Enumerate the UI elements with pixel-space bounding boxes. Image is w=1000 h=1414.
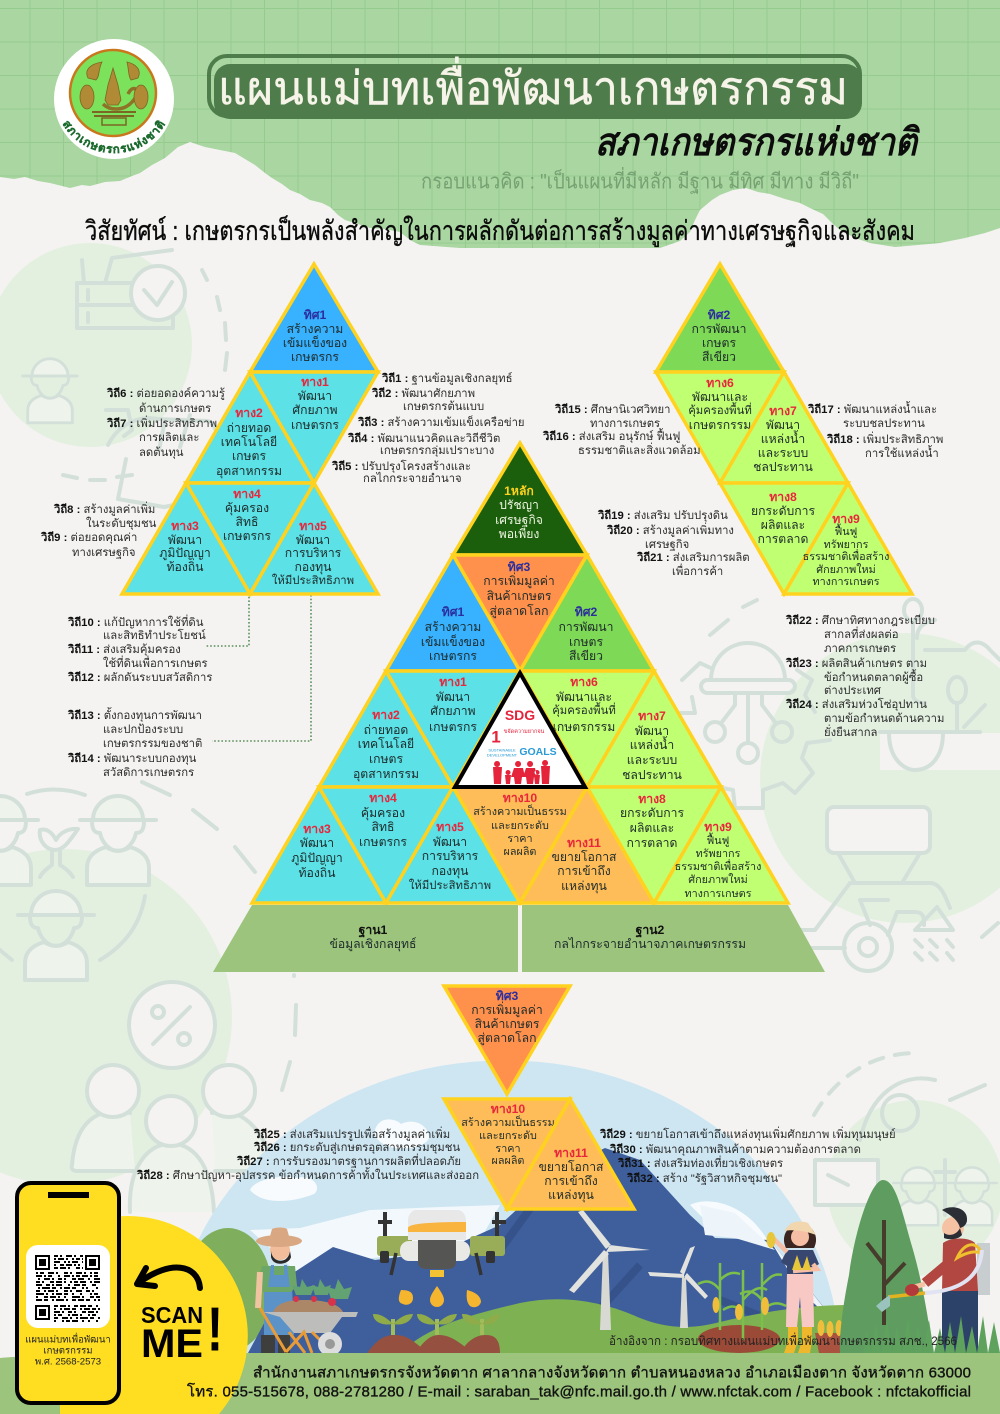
triangle: ทาง7: และระบบ xyxy=(627,753,677,767)
methods 15-18: ธรรมชาติและสิ่งแวดล้อม xyxy=(578,442,701,457)
methods 19-21: วิถี21 : ส่งเสริมการผลิต xyxy=(636,551,750,564)
triangle: ทาง5: การบริหาร xyxy=(422,849,479,863)
methods 10-14: วิถี11 : ส่งเสริมคุ้มครอง xyxy=(67,643,181,656)
icon: farmer top left xyxy=(23,359,77,423)
triangle: ทิศ1: เกษตรกร xyxy=(429,649,477,663)
base 2: กลไกกระจายอำนาจภาคเกษตรกรรม xyxy=(554,937,746,951)
triangle: ทาง9: ทางการเกษตร xyxy=(812,576,880,588)
triangle: ทิศ2: การพัฒนา xyxy=(692,322,746,336)
methods 10-14: วิถี10 : แก้ปัญหาการใช้ที่ดิน xyxy=(67,614,204,629)
triangle: ทิศ1: สร้างความ xyxy=(425,620,481,634)
footer contacts: โทร. 055-515678, 088-2781280 / E-mail : saraban_tak@nfc.mail.go.th / www.nfctak.com / Facebook : nfctakofficial xyxy=(187,1382,971,1400)
triangle: ทาง7 xyxy=(720,372,848,483)
triangle: ทาง4: คุ้มครอง xyxy=(225,501,269,516)
methods 25-28: วิถี26 : ยกระดับสู่เกษตรอุตสาหกรรมชุมชน xyxy=(253,1141,460,1154)
SDG centre triangle: DEVELOPMENT xyxy=(487,752,518,758)
triangle: ทาง9: ฟื้นฟู xyxy=(707,832,729,847)
triangle: ทาง10 xyxy=(444,1099,570,1209)
triangle: ทาง9: ฟื้นฟู xyxy=(835,523,857,538)
triangle: ทาง1 xyxy=(386,671,520,787)
triangle: ทาง2 xyxy=(319,671,453,787)
triangle: ทาง1: ศักยภาพ xyxy=(430,704,476,718)
triangle: ทาง9: ทางการเกษตร xyxy=(684,888,752,900)
triangle: ทาง10: สร้างความเป็นธรรม xyxy=(461,1115,555,1129)
triangle: ทาง3 xyxy=(252,787,386,903)
base 1: ข้อมูลเชิงกลยุทธ์ xyxy=(329,937,417,952)
triangle: ทิศ3: สินค้าเกษตร xyxy=(487,589,552,603)
methods 29-32: วิถี29 : ขยายโอกาสเข้าถึงแหล่งทุนเพิ่มศักยภาพ เพิ่มทุนมนุษย์ xyxy=(599,1126,896,1141)
methods 19-21: เพื่อการค้า xyxy=(672,563,723,578)
triangle: ทาง2: อุตสาหกรรม xyxy=(216,464,282,479)
triangle: ทาง8 xyxy=(587,787,721,903)
triangle: ทาง10: ราคา xyxy=(507,833,533,845)
triangle: ทาง8: ทาง8 xyxy=(769,490,797,504)
triangle: ทาง9: ศักยภาพใหม่ xyxy=(816,563,876,576)
triangle: ทาง2 xyxy=(186,372,314,483)
triangle: ทิศ3: การเพิ่มมูลค่า xyxy=(483,572,555,589)
triangle: ทาง9: ทาง9 xyxy=(704,820,732,834)
triangle: ทิศ2 xyxy=(520,555,654,671)
methods 22-24 xyxy=(785,614,944,739)
QR caption: พ.ศ. 2568-2573 xyxy=(35,1356,101,1368)
methods 15-18: วิถี17 : พัฒนาแหล่งน้ำและ xyxy=(807,401,937,416)
methods 10-14: วิถี12 : ผลักดันระบบสวัสดิการ xyxy=(67,671,212,684)
triangle: ทาง3: ภูมิปัญญา xyxy=(291,851,343,866)
bottom flipped pyramid xyxy=(444,986,634,1209)
methods 19-21 xyxy=(597,509,750,578)
bottom landscape scene xyxy=(170,1060,1000,1356)
triangle: ทาง6: ทาง6 xyxy=(570,675,598,689)
triangle: ทาง1: พัฒนา xyxy=(436,690,470,704)
triangle: ทาง2: เกษตร xyxy=(369,752,403,766)
methods 10-14: และสิทธิทำประโยชน์ xyxy=(103,628,206,642)
triangle: ทาง2: ทาง2 xyxy=(235,406,263,420)
SDG centre triangle xyxy=(455,673,585,787)
triangle: ทาง11: แหล่งทุน xyxy=(561,879,607,894)
triangle: ทิศ1: เข้มแข็งของ xyxy=(283,335,347,350)
triangle: ทาง8: การตลาด xyxy=(758,532,808,546)
icon: hand and plant xyxy=(106,410,218,507)
triangle: ทาง6 xyxy=(656,372,784,483)
methods 10-14: วิถี14 : พัฒนาระบบกองทุน xyxy=(67,752,197,765)
triangle: ทาง4: คุ้มครอง xyxy=(361,806,405,821)
methods 22-24: วิถี22 : ศึกษาทิศทางกฎระเบียบ xyxy=(785,614,935,627)
icon: gear with helmet xyxy=(677,600,830,808)
methods 15-18: วิถี16 : ส่งเสริม อนุรักษ์ ฟื้นฟู xyxy=(542,428,680,443)
reference note: อ้างอิงจาก : กรอบทิศทางแผนแม่บทเพื่อพัฒนาเกษตรกรรม สภช., 2566 xyxy=(609,1332,957,1348)
icon: plants and pot xyxy=(880,599,1000,770)
triangle: ทาง7 xyxy=(587,671,721,787)
triangle: ทิศ3: สู่ตลาดโลก xyxy=(490,604,548,619)
triangle: 1 หลัก: พอเพียง xyxy=(499,527,539,541)
triangle: ทาง1: ทาง1 xyxy=(301,375,329,389)
triangle: ทาง1: เกษตรกร xyxy=(429,720,477,734)
triangle: ทาง10: และยกระดับ xyxy=(491,820,549,832)
triangle: ทาง9: ทรัพยากร xyxy=(696,848,741,860)
triangle: ทาง1: ทาง1 xyxy=(439,675,467,689)
triangle: ทิศ1 xyxy=(250,264,378,372)
triangle: ทาง5: พัฒนา xyxy=(296,533,330,547)
methods 1-5: วิถี1 : ฐานข้อมูลเชิงกลยุทธ์ xyxy=(381,371,512,385)
triangle: ทาง5: ให้มีประสิทธิภาพ xyxy=(272,574,354,587)
triangle: ทาง5: กองทุน xyxy=(431,864,469,879)
methods 6-9: วิถี6 : ต่อยอดองค์ความรู้ xyxy=(106,386,225,400)
triangle: ทาง9: ทาง9 xyxy=(832,512,860,526)
green ground xyxy=(400,1299,850,1353)
triangle: ทิศ1 xyxy=(386,555,520,671)
triangle: ทาง6: เกษตรกรรม xyxy=(553,720,615,734)
methods 10-14: สวัสดิการเกษตรกร xyxy=(103,767,194,779)
triangle: ทิศ1: ทิศ1 xyxy=(442,605,464,619)
methods 19-21: วิถี20 : สร้างมูลค่าเพิ่มทาง xyxy=(606,522,734,537)
triangle: ทาง5: ทาง5 xyxy=(299,519,327,533)
methods 10-14: ใช้ที่ดินเพื่อการเกษตร xyxy=(103,655,208,670)
yellow scan circle xyxy=(60,1216,248,1414)
triangle: ทาง4 xyxy=(319,787,453,903)
methods 22-24: สากลที่ส่งผลต่อ xyxy=(824,626,899,641)
sprouts on soil xyxy=(367,1314,500,1353)
icon: crate with check xyxy=(63,250,227,480)
triangle: ทาง8: การตลาด xyxy=(627,836,677,850)
triangle: ทาง8 xyxy=(720,483,848,594)
methods 1-5: เกษตรกรต้นแบบ xyxy=(403,400,484,413)
SDG centre triangle: GOALS xyxy=(519,746,557,758)
triangle: ทาง2: เทคโนโลยี xyxy=(221,435,277,449)
methods 1-5: วิถี2 : พัฒนาศักยภาพ xyxy=(371,387,475,400)
methods 29-32: วิถี32 : สร้าง "รัฐวิสาหกิจชุมชน" xyxy=(626,1172,782,1185)
title banner: แผนแม่บทเพื่อพัฒนาเกษตรกรรม xyxy=(218,56,848,114)
arrow pointing to QR xyxy=(137,1268,200,1288)
icon: farmers and sprout xyxy=(0,782,296,1090)
methods 15-18 xyxy=(542,401,943,460)
triangle: ทาง6: พัฒนาและ xyxy=(556,690,612,704)
triangle: ทาง10: ผลผลิต xyxy=(504,846,536,858)
methods 22-24: ข้อกำหนดตลาดผู้ซื้อ xyxy=(824,669,923,684)
scan me text: ! xyxy=(207,1296,223,1364)
triangle: ทาง4: เกษตรกร xyxy=(359,835,407,849)
triangle: ทาง4: สิทธิ xyxy=(372,820,394,834)
triangle: ทาง6 xyxy=(520,671,654,787)
triangle: ทาง3: ภูมิปัญญา xyxy=(159,546,211,561)
left green hill xyxy=(184,1228,272,1352)
methods 6-9: วิถี8 : สร้างมูลค่าเพิ่ม xyxy=(53,501,155,516)
triangle: ทิศ2: ทิศ2 xyxy=(575,605,597,619)
methods 22-24: ภาคการเกษตร xyxy=(824,643,896,655)
triangle: ทิศ1: ทิศ1 xyxy=(304,308,326,322)
triangle: ทาง1 xyxy=(250,372,378,483)
header green grid paper xyxy=(0,0,1000,256)
triangle: ทาง10 xyxy=(453,787,587,903)
triangle: ทาง7: พัฒนา xyxy=(766,418,800,432)
QR caption: แผนแม่บทเพื่อพัฒนา xyxy=(25,1332,111,1346)
triangle: ทาง2: ถ่ายทอด xyxy=(364,723,408,737)
methods 25-28: วิถี25 : ส่งเสริมแปรรูปเพื่อสร้างมูลค่าเพิ่ม xyxy=(253,1126,450,1141)
methods 1-5: เกษตรกรกลุ่มเปราะบาง xyxy=(380,445,494,457)
methods 15-18: ทางการเกษตร xyxy=(590,418,660,430)
methods 22-24: วิถี23 : ผลิตสินค้าเกษตร ตาม xyxy=(785,657,927,670)
sky dome xyxy=(170,1060,840,1353)
triangle: ทาง11: ทาง11 xyxy=(554,1146,588,1160)
triangle: ทิศ3: การเพิ่มมูลค่า xyxy=(471,1001,543,1018)
phone with QR code xyxy=(17,1183,119,1403)
triangle: ทิศ3: ทิศ3 xyxy=(496,989,518,1003)
triangle: ทาง10: ทาง10 xyxy=(503,791,537,805)
triangle: ทาง4: ทาง4 xyxy=(233,487,261,501)
triangle: ทาง4 xyxy=(186,483,314,594)
QR caption: เกษตรกรรม xyxy=(43,1346,93,1356)
triangle: ทาง2: อุตสาหกรรม xyxy=(353,767,419,782)
methods 25-28: วิถี27 : การรับรองมาตรฐานการผลิตที่ปลอดภัย xyxy=(236,1153,461,1168)
triangle: ทิศ3: ทิศ3 xyxy=(508,560,530,574)
farmer with wheelbarrow xyxy=(256,1228,358,1356)
methods 1-5: วิถี4 : พัฒนาแนวคิดและวิถีชีวิต xyxy=(347,432,500,445)
methods 6-9: ในระดับชุมชน xyxy=(86,517,157,530)
triangle: ทาง4: สิทธิ xyxy=(236,515,258,529)
triangle: ทาง7: แหล่งน้ำ xyxy=(630,736,674,752)
triangle: ทาง9 xyxy=(784,483,912,594)
triangle: ทาง11 xyxy=(520,787,654,903)
blue mountains xyxy=(248,1148,842,1353)
methods 15-18: ระบบชลประทาน xyxy=(843,418,925,430)
triangle: ทาง9: ธรรมชาติเพื่อสร้าง xyxy=(803,549,889,563)
methods 10-14: และปกป้องระบบ xyxy=(103,723,183,736)
triangle: ทาง8: ผลิตและ xyxy=(630,821,674,835)
icon: group of people xyxy=(72,1065,272,1212)
triangle: ทาง2: ถ่ายทอด xyxy=(227,421,271,435)
triangle: ทาง3 xyxy=(122,483,250,594)
scan me text: ME xyxy=(141,1322,203,1366)
triangle: ทาง10: ทาง10 xyxy=(491,1102,525,1116)
methods 1-5: กลไกกระจายอำนาจ xyxy=(363,472,462,485)
base 1 xyxy=(213,905,518,972)
methods 22-24: ตามข้อกำหนดด้านความ xyxy=(824,712,944,725)
fertilizer drops xyxy=(399,1286,481,1307)
triangle: ทาง10: สร้างความเป็นธรรม xyxy=(473,804,567,818)
triangle: ทิศ2: เกษตร xyxy=(569,635,603,649)
scan me text xyxy=(141,1296,223,1366)
triangle: ทิศ3 xyxy=(453,555,587,671)
SDG centre triangle: ขจัดความยากจน xyxy=(504,728,545,735)
triangle: ทาง5: การบริหาร xyxy=(285,546,342,560)
triangle: ทาง7: ทาง7 xyxy=(638,709,666,723)
triangle: ทาง3: พัฒนา xyxy=(300,836,334,850)
triangle: ทิศ1: สร้างความ xyxy=(287,322,343,336)
man with sprayer xyxy=(876,1207,990,1353)
triangle: ทาง2: เทคโนโลยี xyxy=(358,737,414,751)
triangle: ทาง7: ทาง7 xyxy=(769,404,797,418)
scan me text: SCAN xyxy=(141,1302,203,1328)
triangle: ทาง5: พัฒนา xyxy=(433,835,467,849)
base 1: ฐาน1 xyxy=(359,923,388,938)
SDG centre triangle: SUSTAINABLE xyxy=(488,748,516,752)
triangle: ทาง9: ทรัพยากร xyxy=(824,539,869,551)
background decorative icons xyxy=(0,243,1000,1276)
triangle: ทาง11: ทาง11 xyxy=(567,836,601,850)
triangle: ทิศ2 xyxy=(656,264,784,372)
methods 15-18: วิถี18 : เพิ่มประสิทธิภาพ xyxy=(826,431,943,446)
triangle: ทาง7: ชลประทาน xyxy=(753,460,814,474)
methods 6-9: ด้านการเกษตร xyxy=(139,402,211,415)
triangle: ทาง5 xyxy=(250,483,378,594)
framework caption: กรอบแนวคิด : "เป็นแผนที่มีหลัก มีฐาน มีทิศ มีทาง มีวิถี" xyxy=(421,166,859,194)
triangle: ทาง11: แหล่งทุน xyxy=(548,1188,594,1203)
QR caption xyxy=(25,1332,111,1368)
triangle: ทิศ2: เกษตร xyxy=(702,336,736,350)
tree xyxy=(840,1180,933,1353)
SDG centre triangle: 1 xyxy=(491,728,501,746)
wind turbines xyxy=(569,1210,708,1330)
triangle: ทาง10: ผลผลิต xyxy=(492,1155,524,1167)
triangle: ทาง9: ธรรมชาติเพื่อสร้าง xyxy=(675,859,761,873)
triangle: ทาง6: พัฒนาและ xyxy=(692,390,748,404)
grass xyxy=(863,1316,1000,1353)
triangle: ทาง8: ผลิตและ xyxy=(761,518,805,532)
triangle: ทาง6: ทาง6 xyxy=(706,376,734,390)
footer address: สำนักงานสภาเกษตรกรจังหวัดตาก ศาลากลางจังหวัดตาก ตำบลหนองหลวง อำเภอเมืองตาก จังหวัดตาก 63000 xyxy=(253,1364,971,1382)
methods 19-21: เศรษฐกิจ xyxy=(645,539,689,551)
methods 29-32: วิถี30 : พัฒนาคุณภาพสินค้าตามความต้องการตลาด xyxy=(609,1143,861,1156)
triangle: ทิศ1: เข้มแข็งของ xyxy=(421,634,485,649)
dotted connector lines xyxy=(206,568,311,741)
methods 6-9: วิถี9 : ต่อยอดคุณค่า xyxy=(40,531,137,544)
triangle: 1 หลัก: 1หลัก xyxy=(504,484,534,498)
triangle: ทิศ1: เกษตรกร xyxy=(291,350,339,364)
triangle: ทาง2: เกษตร xyxy=(232,449,266,463)
triangle: ทาง3: ท้องถิ่น xyxy=(166,558,204,574)
triangle: ทิศ3: สู่ตลาดโลก xyxy=(478,1031,536,1046)
right pyramid: direction 2 xyxy=(656,264,912,594)
logo emblem xyxy=(80,62,148,125)
triangle: ทิศ2: สีเขียว xyxy=(702,350,736,364)
triangle: ทาง9 xyxy=(654,787,788,903)
SDG centre triangle: SDG xyxy=(505,707,535,723)
triangle: ทาง7: พัฒนา xyxy=(635,724,669,738)
triangle: ทาง1: เกษตรกร xyxy=(291,418,339,432)
triangle: ทาง6: คุ้มครองพื้นที่ xyxy=(552,702,616,717)
triangle: 1 หลัก: ปรัชญา xyxy=(499,498,539,512)
methods 25-28: วิถี28 : ศึกษาปัญหา-อุปสรรค ข้อกำหนดการค้าทั้งในประเทศและส่งออก xyxy=(136,1167,479,1182)
triangle: ทิศ2: การพัฒนา xyxy=(558,620,614,634)
triangle: ทาง7: แหล่งน้ำ xyxy=(761,430,805,446)
triangle: ทาง5: กองทุน xyxy=(294,560,332,575)
triangle: ทาง4: ทาง4 xyxy=(369,791,397,805)
left pyramid: direction 1 xyxy=(122,264,378,594)
methods 29-32: วิถี31 : ส่งเสริมท่องเที่ยวเชิงเกษตร xyxy=(617,1155,783,1170)
triangle: ทาง5: ทาง5 xyxy=(436,820,464,834)
methods 10-14 xyxy=(67,614,212,779)
icon: percent xyxy=(129,982,215,1068)
triangle: ทาง1: พัฒนา xyxy=(298,389,332,403)
QR code xyxy=(36,1256,100,1321)
triangle: ทิศ3 xyxy=(444,986,570,1094)
triangle: ทาง3: ท้องถิ่น xyxy=(298,864,336,880)
triangle: ทาง6: คุ้มครองพื้นที่ xyxy=(688,402,752,417)
methods 6-9: วิถี7 : เพิ่มประสิทธิภาพ xyxy=(106,415,217,430)
triangle: ทาง5 xyxy=(386,787,520,903)
triangle: ทาง11: การเข้าถึง xyxy=(557,864,611,878)
triangle: ทาง6: เกษตรกรรม xyxy=(689,418,751,432)
triangle: ทาง11 xyxy=(507,1099,634,1209)
icon: seeder machine xyxy=(800,807,998,971)
triangle: ทาง10: ราคา xyxy=(495,1143,521,1155)
methods 19-21: วิถี19 : ส่งเสริม ปรับปรุงดิน xyxy=(597,509,728,522)
triangle: ทาง1: ศักยภาพ xyxy=(292,403,338,417)
footer band xyxy=(0,1353,1000,1414)
triangle: ทาง11: การเข้าถึง xyxy=(544,1174,598,1188)
triangle: ทาง2: ทาง2 xyxy=(372,708,400,722)
triangle: ทิศ3: สินค้าเกษตร xyxy=(475,1017,540,1031)
methods 15-18: วิถี15 : ศึกษานิเวศวิทยา xyxy=(554,403,670,416)
methods 10-14: วิถี13 : ตั้งกองทุนการพัฒนา xyxy=(67,707,202,722)
triangle: ทิศ2: สีเขียว xyxy=(569,649,603,663)
base 2 xyxy=(522,905,825,972)
central pyramid xyxy=(252,443,788,903)
triangle: ทาง5: ให้มีประสิทธิภาพ xyxy=(409,879,491,892)
methods 25-28 xyxy=(136,1126,479,1182)
logo: สภาเกษตรกรแห่งชาติ xyxy=(62,120,166,154)
methods 6-9: ทางเศรษฐกิจ xyxy=(72,547,136,559)
methods 1-5: วิถี3 : สร้างความเข้มแข็งเครือข่าย xyxy=(357,414,525,429)
methods 22-24: วิถี24 : ส่งเสริมห่วงโซ่อุปทาน xyxy=(785,697,927,711)
triangle: ทาง3: ทาง3 xyxy=(303,822,331,836)
triangle: 1 หลัก: เศรษฐกิจ xyxy=(495,513,543,527)
methods 1-5: วิถี5 : ปรับปรุงโครงสร้างและ xyxy=(331,459,471,473)
triangle: ทาง3: พัฒนา xyxy=(168,533,202,547)
triangle: ทิศ2: ทิศ2 xyxy=(708,308,730,322)
methods 29-32 xyxy=(599,1126,896,1185)
soil and corn xyxy=(698,1263,845,1353)
triangle: ทาง8: ยกระดับการ xyxy=(751,504,815,518)
methods 15-18: การใช้แหล่งน้ำ xyxy=(865,445,939,460)
methods 6-9 xyxy=(40,386,225,559)
triangle: ทาง7: ชลประทาน xyxy=(622,768,683,782)
triangle: ทาง10: และยกระดับ xyxy=(479,1130,537,1142)
logo xyxy=(54,39,174,159)
methods 6-9: ลดต้นทุน xyxy=(139,446,184,459)
triangle: ทาง9: ศักยภาพใหม่ xyxy=(688,873,748,886)
triangle: ทาง11: ขยายโอกาส xyxy=(539,1160,604,1174)
triangle: ทาง8: ยกระดับการ xyxy=(620,806,684,820)
methods 1-5 xyxy=(331,371,525,485)
triangle: ทาง4: เกษตรกร xyxy=(223,529,271,543)
triangle: 1 หลัก xyxy=(453,443,587,555)
methods 10-14: เกษตรกรรมของชาติ xyxy=(103,738,202,750)
triangle: ทาง7: และระบบ xyxy=(758,446,808,460)
methods 6-9: การผลิตและ xyxy=(139,432,199,444)
icon: coin and workers xyxy=(814,1053,997,1225)
triangle: ทาง8: ทาง8 xyxy=(638,792,666,806)
subtitle: สภาเกษตรกรแห่งชาติ xyxy=(595,122,921,164)
triangle: ทาง3: ทาง3 xyxy=(171,519,199,533)
methods 22-24: ยั่งยืนสากล xyxy=(824,724,877,739)
base 2: ฐาน2 xyxy=(636,923,665,938)
woman farmer xyxy=(766,1222,819,1353)
clouds xyxy=(250,1119,770,1245)
drone xyxy=(377,1210,506,1277)
methods 22-24: ต่างประเทศ xyxy=(824,685,882,697)
triangle: ทาง11: ขยายโอกาส xyxy=(552,850,617,864)
